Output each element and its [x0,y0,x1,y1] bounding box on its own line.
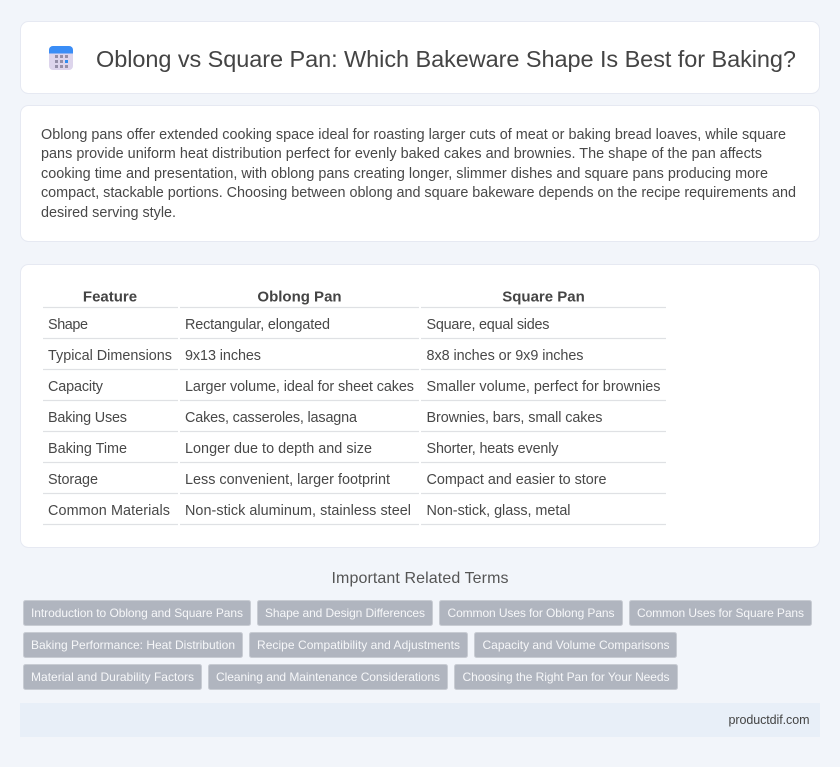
text block: description: Oblong pans offer extended cooking space ideal for roasting larger cuts of meat or baking bread loaves, while square [41,127,786,143]
tag [630,600,812,626]
row: baking uses: Brownies, bars, small cakes [426,410,602,426]
row: typical dimensions [48,348,584,364]
icon: calendar [49,46,73,70]
row: storage: Storage [48,472,98,488]
row: capacity: Smaller volume, perfect for brownies [426,379,660,395]
footer credit: productdif.com [728,713,810,727]
text block: description [41,127,796,221]
footer [20,703,820,737]
row: common materials: Common Materials [48,503,170,519]
row: common materials: Non-stick, glass, metal [426,503,570,519]
row: common materials: Non-stick aluminum, stainless steel [185,503,411,519]
text block: description: cooking time and presentation, with oblong pans creating longer, slimmer dishes and square pans producing more [41,166,768,182]
row: baking uses: Baking Uses [48,410,127,426]
tag: Introduction to Oblong and Square Pans [31,606,243,620]
row: storage [48,472,606,488]
row: shape: Square, equal sides [426,317,550,333]
tag [24,600,250,626]
row: shape: Shape [48,317,88,333]
panel: description [20,106,820,242]
tag: Recipe Compatibility and Adjustments [257,638,460,652]
table header: Oblong Pan [257,288,342,306]
title: Oblong vs Square Pan: Which Bakeware Shape Is Best for Baking? [96,46,796,72]
row: baking uses [48,410,602,426]
row: typical dimensions: 8x8 inches or 9x9 inches [426,348,584,364]
panel: comparison table [20,264,820,548]
row: capacity: Capacity [48,379,104,395]
tag [24,664,202,690]
tag: Baking Performance: Heat Distribution [31,638,235,652]
tag [454,664,678,690]
tag [474,632,676,658]
row: capacity: Larger volume, ideal for sheet cakes [185,379,414,395]
tag: Common Uses for Oblong Pans [448,606,614,620]
row: storage: Less convenient, larger footprint [185,472,390,488]
row: baking time: Longer due to depth and size [185,441,372,457]
header panel [20,22,820,94]
related term tags [24,600,812,690]
row: baking time: Shorter, heats evenly [426,441,559,457]
row: typical dimensions: Typical Dimensions [48,348,172,364]
table header: Feature [83,288,137,306]
row: common materials [48,503,570,519]
heading: related terms: Important Related Terms [332,570,508,587]
tag: Common Uses for Square Pans [637,606,804,620]
tag: Material and Durability Factors [31,670,194,684]
row: capacity [48,379,660,395]
text block: description: desired serving style. [41,205,176,221]
row: baking time [48,441,559,457]
text block: description: pans provide uniform heat distribution perfect for evenly baked cakes and brownies. The shape of the pan affects [41,146,762,162]
tag [258,600,432,626]
table header: Square Pan [502,288,585,306]
tag: Capacity and Volume Comparisons [482,638,670,652]
row: typical dimensions: 9x13 inches [185,348,261,364]
tag: Choosing the Right Pan for Your Needs [462,670,670,684]
row: baking time: Baking Time [48,441,127,457]
row: storage: Compact and easier to store [426,472,606,488]
row: shape: Rectangular, elongated [185,317,330,333]
tag [208,664,448,690]
tag [24,632,242,658]
row: baking uses: Cakes, casseroles, lasagna [185,410,357,426]
table header [83,288,585,306]
tag [250,632,468,658]
tag [440,600,622,626]
text block: description: compact, stackable portions. Choosing between oblong and square bakeware depends on the recipe requirements and [41,185,796,201]
tag: Shape and Design Differences [265,606,425,620]
row: shape [48,317,550,333]
tag: Cleaning and Maintenance Considerations [216,670,440,684]
